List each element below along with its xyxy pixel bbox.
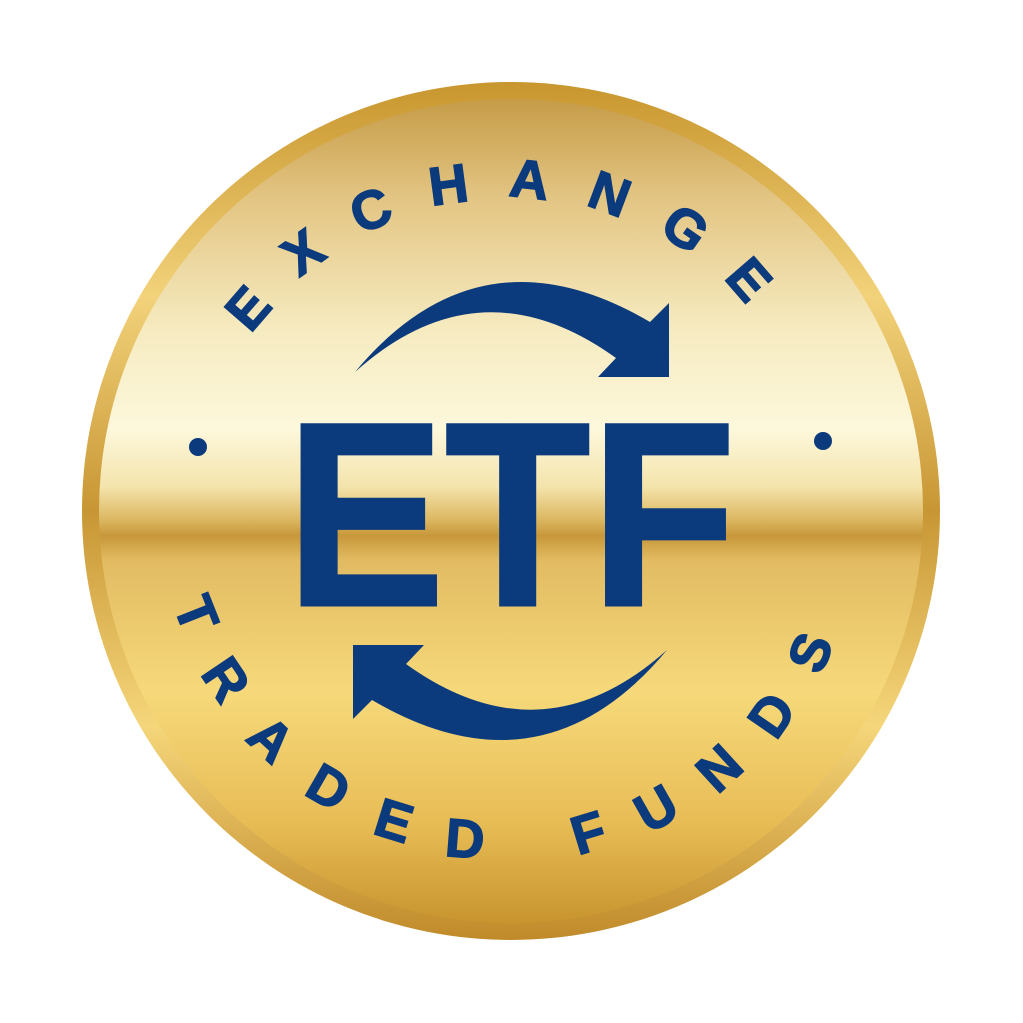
curved text: TRADED FUNDS: TRADED FUNDS <box>176 591 831 858</box>
outer gold ring <box>82 82 940 940</box>
inner gold disk <box>99 99 923 923</box>
title: ETF: ETF <box>286 368 736 661</box>
right dot <box>814 432 832 450</box>
left dot <box>189 438 207 456</box>
arrow: bottom curved arrow <box>353 645 667 740</box>
curved text: EXCHANGE: EXCHANGE <box>224 160 774 332</box>
arrow: top curved arrow <box>355 282 669 377</box>
